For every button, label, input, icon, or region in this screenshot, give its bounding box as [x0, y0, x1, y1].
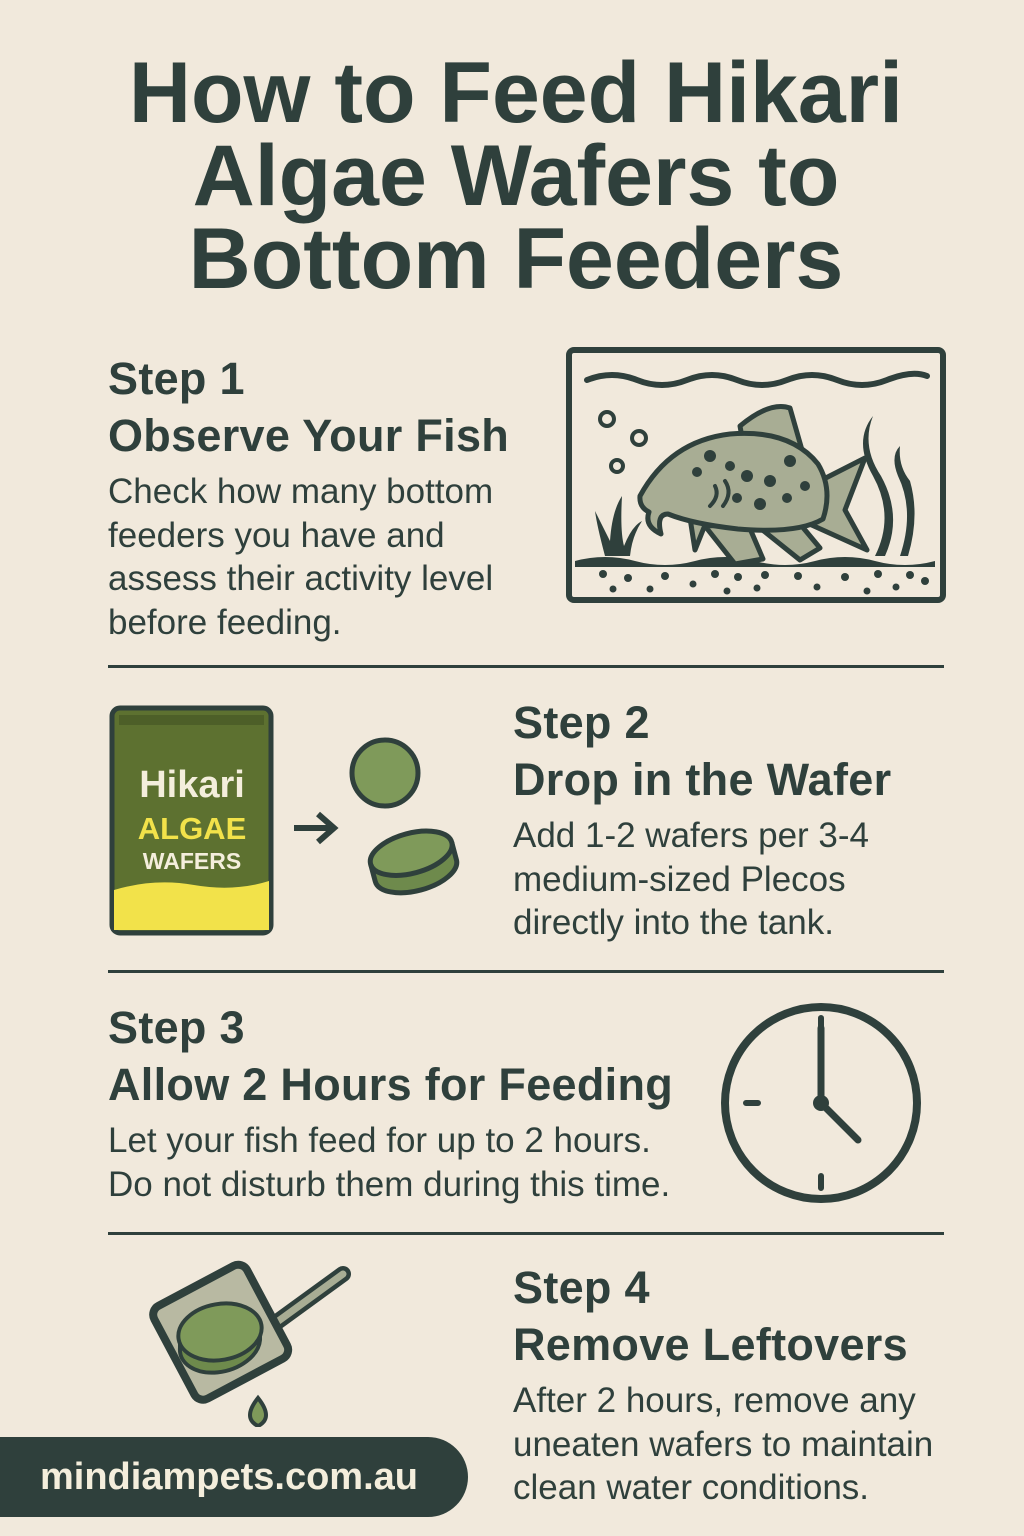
step 4 text: Remove Leftovers	[513, 1319, 908, 1370]
step 1 text: before feeding.	[108, 602, 342, 642]
step 1 text: Step 1	[108, 353, 245, 404]
footer: website pill: mindiampets.com.au	[40, 1456, 418, 1498]
step 2 text: Step 2	[513, 697, 650, 748]
step 3 text: Do not disturb them during this time.	[108, 1164, 670, 1204]
step 3 text: Let your fish feed for up to 2 hours.	[108, 1121, 651, 1160]
step 3 text: Allow 2 Hours for Feeding	[108, 1059, 673, 1110]
step 2 text: medium-sized Plecos	[513, 860, 846, 898]
icon: net with wafer	[149, 1260, 351, 1427]
step 2 text: directly into the tank.	[513, 903, 834, 942]
icon: Hikari package: WAFERS	[143, 848, 241, 874]
step 1 text: feeders you have and	[108, 516, 445, 554]
arrow	[294, 812, 338, 844]
icon: aquarium with pleco	[566, 347, 946, 603]
step 4 text: After 2 hours, remove any	[513, 1381, 916, 1420]
step 2 text: Add 1-2 wafers per 3-4	[513, 816, 869, 855]
step 1 text: assess their activity level	[108, 559, 493, 598]
step 1 text: Observe Your Fish	[108, 410, 509, 461]
step 4 text: clean water conditions.	[513, 1468, 869, 1507]
title: Bottom Feeders	[189, 211, 843, 307]
footer: website pill	[0, 1437, 468, 1517]
step 2 text	[513, 697, 891, 942]
title: How to Feed Hikari	[129, 45, 903, 141]
icon: wafers	[350, 738, 460, 896]
step 1 text	[108, 353, 509, 642]
icon: Hikari package	[110, 706, 274, 936]
step 4 text	[513, 1262, 933, 1507]
step 4 text: Step 4	[513, 1262, 650, 1313]
title: Algae Wafers to	[193, 128, 839, 224]
step 3 text: Step 3	[108, 1002, 245, 1053]
step 2 text: Drop in the Wafer	[513, 754, 891, 805]
step 4 text: uneaten wafers to maintain	[513, 1424, 933, 1464]
icon: clock	[721, 1003, 921, 1203]
step 1 text: Check how many bottom	[108, 472, 493, 511]
title	[129, 45, 903, 307]
icon: Hikari package: Hikari	[139, 764, 245, 806]
icon: Hikari package: ALGAE	[138, 811, 246, 846]
step 3 text	[108, 1002, 673, 1204]
